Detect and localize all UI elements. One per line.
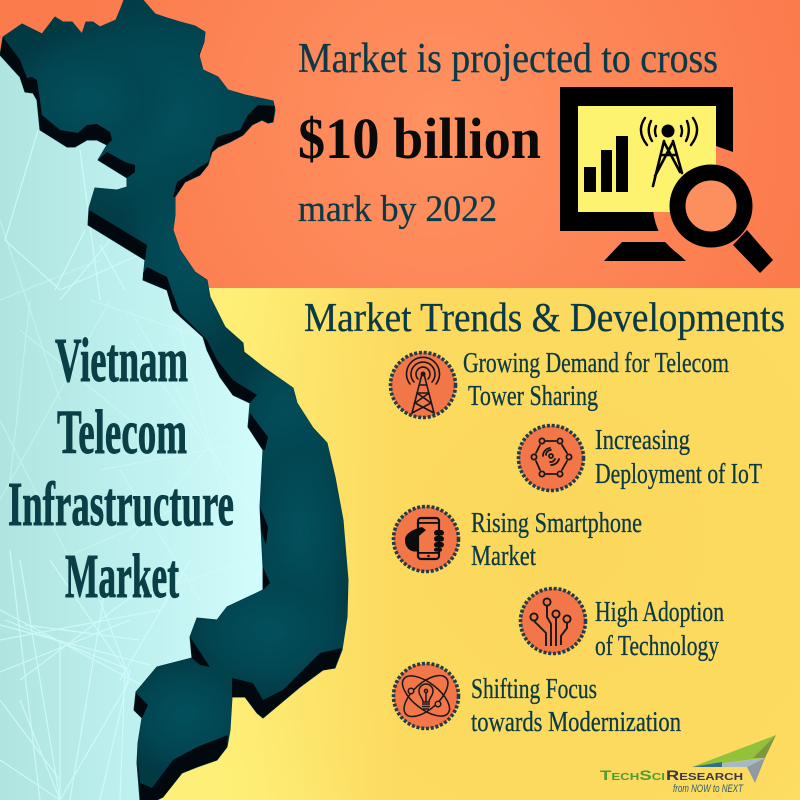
- icon: circuit traces: [520, 588, 586, 654]
- logo: TechSci Research: from NOW to NEXT: [673, 783, 744, 795]
- trend 2: deployment of IoT: Increasing: [595, 425, 690, 456]
- logo: TechSci Research: [600, 735, 776, 795]
- icon: hand holding smartphone: [394, 506, 458, 572]
- trend 4: adoption of technology: of Technology: [595, 631, 719, 662]
- trend 4: adoption of technology: [520, 588, 724, 662]
- trend 5: focus towards modernization: Shifting Focus: [471, 674, 597, 705]
- logo: TechSci Research: Research: [666, 767, 743, 783]
- panel: yellow market trends background: [0, 288, 800, 800]
- trend 1: telecom tower sharing: [390, 348, 729, 418]
- panel: orange market projection background: [0, 0, 800, 288]
- trend 1: telecom tower sharing: Tower Sharing: [468, 381, 598, 412]
- icon: IoT network: [518, 426, 584, 490]
- title: Vietnam Telecom Infrastructure Market: Vietnam: [55, 327, 188, 395]
- title: Vietnam Telecom Infrastructure Market: Infrastructure: [8, 471, 234, 539]
- map shadow relief: [0, 37, 342, 800]
- trend 2: deployment of IoT: [518, 425, 762, 490]
- logo: TechSci Research: TechSci: [600, 767, 665, 783]
- trend 5: focus towards modernization: [394, 664, 681, 738]
- headline figure: $10 billion: $10 billion: [298, 106, 541, 171]
- panel: cyan network background: [0, 56, 262, 800]
- map of Vietnam: [0, 0, 360, 800]
- trend 5: focus towards modernization: towards Modernization: [471, 707, 681, 738]
- title: Vietnam Telecom Infrastructure Market: Telecom: [57, 399, 187, 467]
- icon: monitor with signal tower and magnifier: [560, 87, 773, 273]
- trend 3: smartphone market: Rising Smartphone: [471, 508, 642, 539]
- text: mark by 2022: mark by 2022: [298, 189, 497, 230]
- icon: telecom tower: [390, 352, 456, 418]
- icon: atom with light bulb: [394, 664, 458, 728]
- heading: market is projected to cross: Market is projected to cross: [298, 36, 718, 82]
- title: Vietnam Telecom Infrastructure Market: Market: [65, 543, 179, 611]
- trend 1: telecom tower sharing: Growing Demand for Telecom: [463, 348, 729, 379]
- trend 3: smartphone market: [394, 506, 642, 572]
- title: Vietnam Telecom Infrastructure Market: [8, 327, 234, 611]
- trend 4: adoption of technology: High Adoption: [595, 597, 724, 628]
- trend 3: smartphone market: Market: [471, 541, 536, 572]
